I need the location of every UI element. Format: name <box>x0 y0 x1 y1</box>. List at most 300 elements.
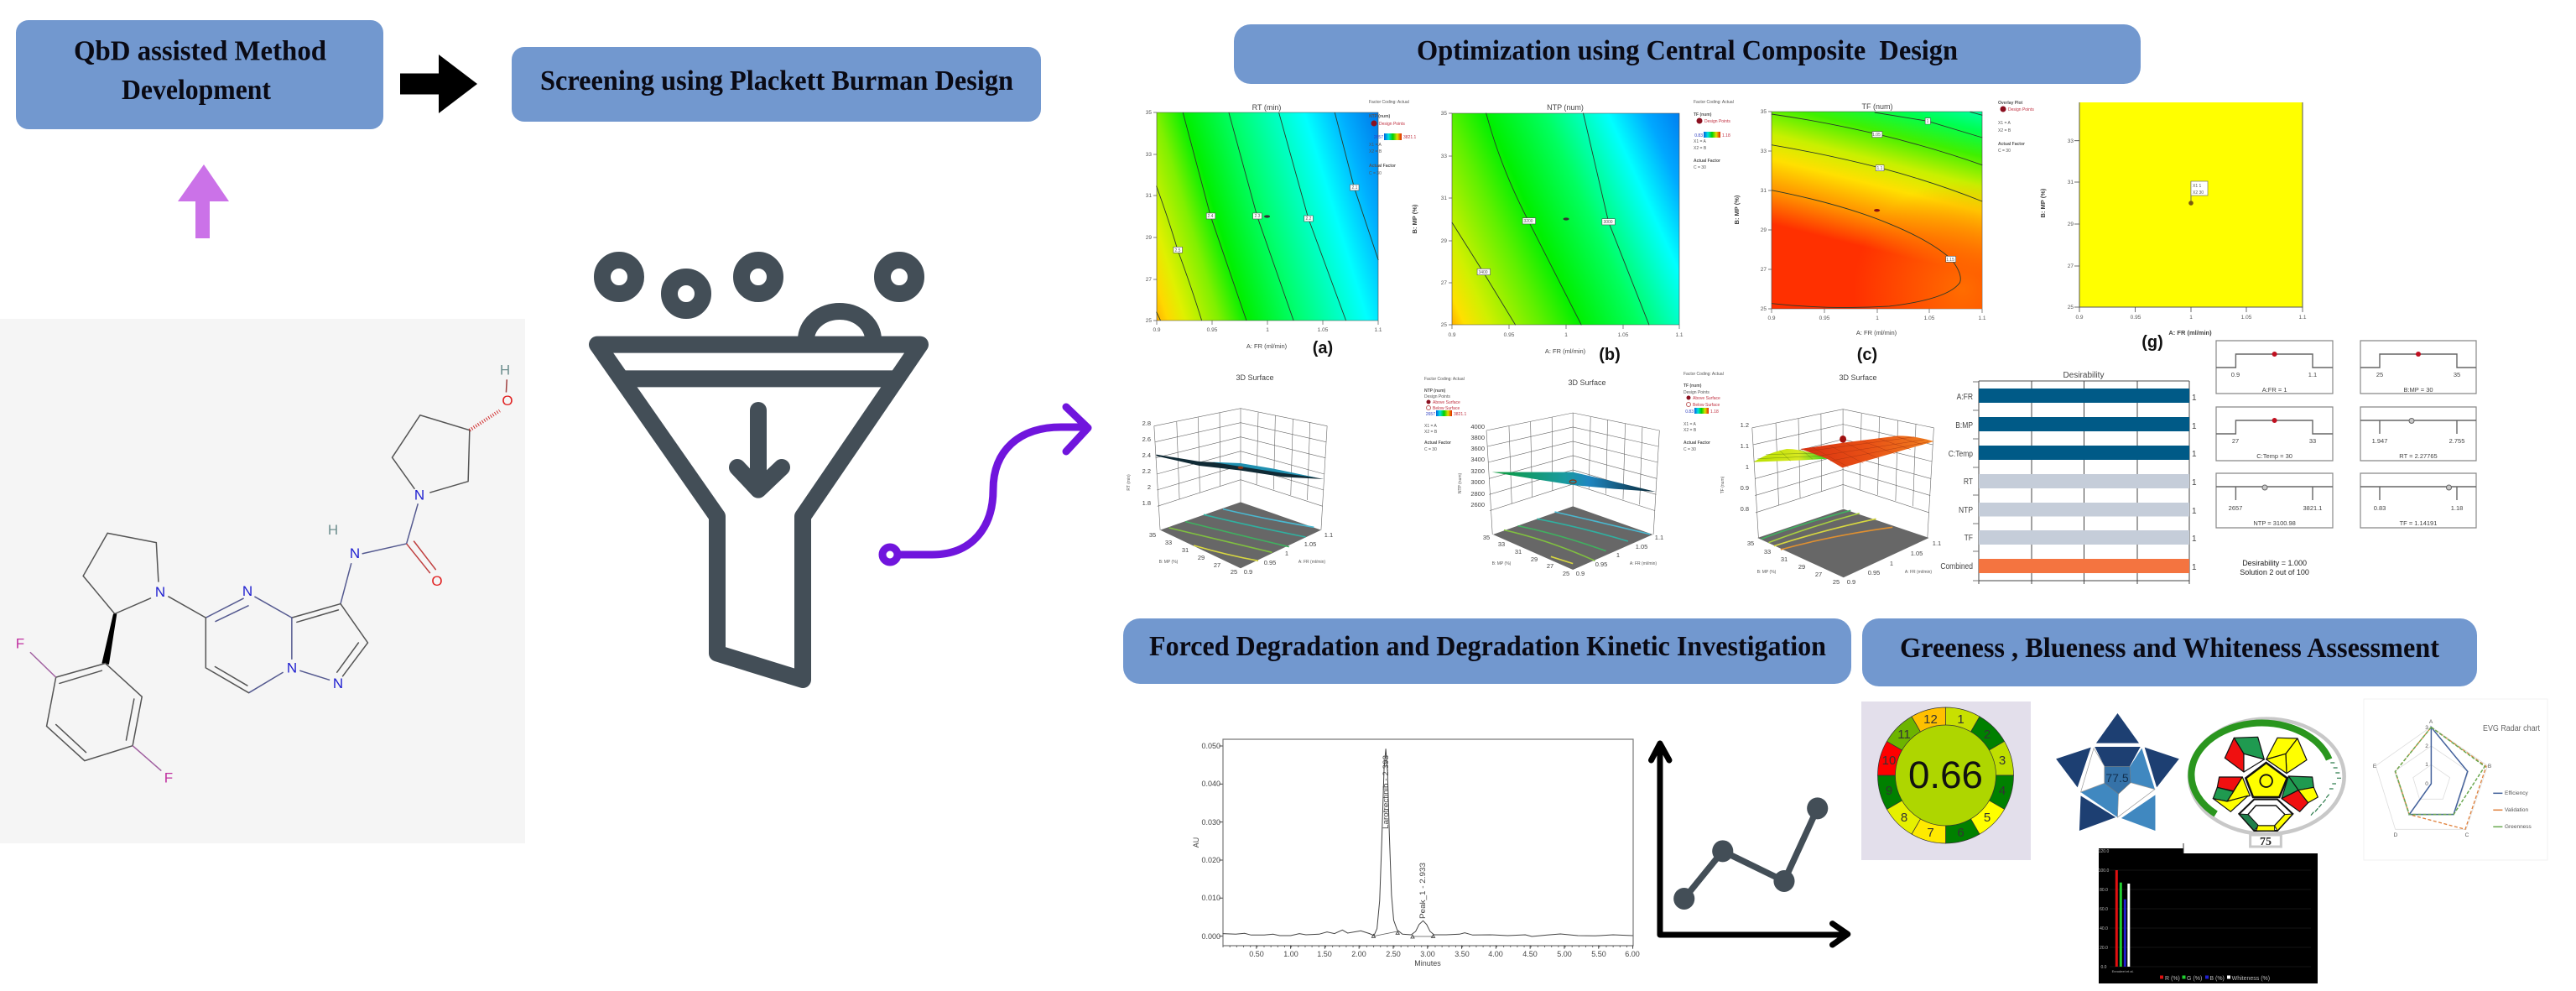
chart: EVG radar chart: EVG Radar chart <box>2483 724 2540 733</box>
chart: contour plot NTP (b): B: MP (%) <box>1733 195 1741 224</box>
chart: 3D surface RT: RT (min) <box>1127 474 1132 491</box>
chart: contour plot RT (a): 27 <box>1146 277 1152 283</box>
chart: 3D surface NTP: 3000 <box>1470 478 1485 486</box>
chart: 3D surface NTP: 0.9 <box>1576 570 1585 577</box>
panel: factor and response solution slider panels: 27 <box>2232 437 2239 445</box>
chart: 3D surface NTP: 25 <box>1563 570 1569 577</box>
chart: contour plot TF (c): 1.1 <box>1978 316 1986 321</box>
chart: RGB whiteness bar chart on black: 0.0 <box>2101 965 2107 970</box>
chart: green pictogram 75 <box>2189 719 2344 848</box>
chart: overlay plot (g): A: FR (ml/min) <box>2168 329 2212 336</box>
chart: HPLC chromatogram: Larotrectinib - 2.393 <box>1382 755 1390 829</box>
arrow: purple curved connector <box>882 407 1088 562</box>
chart: HPLC chromatogram: 5.00 <box>1557 950 1572 958</box>
chart: AGREE pictogram 0.66: 6 <box>1957 826 1965 840</box>
chart: contour plot NTP (b) <box>1441 100 1741 364</box>
chart: 3D surface NTP: NTP (num) <box>1458 472 1463 493</box>
chart: desirability bar chart: Desirability <box>2063 371 2104 380</box>
chart: contour plot TF (c): Overlay Plot <box>1998 101 2023 106</box>
chart: 3D surface TF: B: MP (%) <box>1757 570 1777 575</box>
chart: contour plot TF (c) <box>1761 101 2034 364</box>
chart: RGB whiteness bar chart on black: 20.0 <box>2100 946 2108 951</box>
chart: 3D surface RT: 0.95 <box>1264 559 1276 566</box>
chart: RGB whiteness bar chart on black: B (%) <box>2209 976 2225 982</box>
chart: contour plot TF (c): 33 <box>1761 149 1767 154</box>
panel: factor and response solution slider panels: NTP = 3100.98 <box>2253 519 2296 527</box>
chart: HPLC chromatogram: 0.000 <box>1201 932 1220 941</box>
chart: 3D surface NTP: Actual Factor <box>1424 441 1451 446</box>
panel: molecule structure: H <box>328 522 338 538</box>
chart: desirability bar chart: 1 <box>2192 450 2197 459</box>
chart: contour plot RT (a): 35 <box>1146 110 1152 116</box>
chart: overlay plot (g): X1 1 <box>2193 184 2202 189</box>
chart: contour plot TF (c): C = 30 <box>1998 149 2011 154</box>
chart: 3D surface NTP: Design Points <box>1424 394 1450 399</box>
chart: HPLC chromatogram: 2.50 <box>1386 950 1401 958</box>
chart: HPLC chromatogram: 1.00 <box>1283 950 1298 958</box>
chart: HPLC chromatogram: 4.00 <box>1488 950 1503 958</box>
chart: contour plot RT (a): X1 = A <box>1369 143 1382 148</box>
chart: 3D surface NTP: 2800 <box>1470 490 1485 498</box>
heading: QbD assisted Method Development <box>16 20 383 129</box>
chart: contour plot RT (a): RT (min) <box>1252 103 1281 112</box>
chart: contour plot RT (a): 1.05 <box>1318 327 1329 333</box>
panel: factor and response solution slider panels: Solution 2 out of 100 <box>2240 568 2309 576</box>
heading: Optimization using Central Composite Design <box>1234 24 2141 84</box>
chart: contour plot NTP (b): 3000 <box>1603 220 1613 225</box>
chart: 3D surface TF: 0.95 <box>1868 569 1880 576</box>
chart: contour plot NTP (b): 1.18 <box>1722 133 1730 138</box>
chart: HPLC chromatogram: 0.020 <box>1201 856 1220 864</box>
panel: factor and response solution slider panels: RT = 2.27765 <box>2399 452 2438 460</box>
panel: molecule structure: F <box>16 636 24 652</box>
chart: desirability bar chart: NTP <box>1959 505 1973 514</box>
chart: 3D surface NTP: Below Surface <box>1433 406 1460 411</box>
panel: molecule structure: N <box>242 583 252 599</box>
chart: 3D surface TF: 1.1 <box>1741 442 1749 450</box>
chart: 3D surface NTP: 0.95 <box>1595 561 1607 568</box>
chart: AGREE pictogram 0.66: 4 <box>1999 784 2006 798</box>
chart: contour plot NTP (b): TF (num) <box>1694 112 1712 117</box>
chart: contour plot NTP (b): (b) <box>1599 346 1621 364</box>
chart: HPLC chromatogram: 2.00 <box>1351 950 1366 958</box>
chart: contour plot RT (a): 1.1 <box>1374 327 1382 333</box>
chart: AGREE pictogram 0.66: 1 <box>1957 712 1965 727</box>
chart: contour plot NTP (b): 29 <box>1441 238 1447 244</box>
panel: factor and response solution slider panels: 1.18 <box>2451 504 2463 512</box>
chart: contour plot TF (c): Actual Factor <box>1998 142 2025 147</box>
chart: 3D surface RT: 2.8 <box>1142 420 1151 427</box>
chart: 3D surface NTP: NTP (num) <box>1424 389 1446 394</box>
chart: 3D surface RT: 2.6 <box>1142 436 1151 443</box>
chart: AGREE pictogram 0.66: 7 <box>1927 826 1934 840</box>
chart: contour plot RT (a): 3821.1 <box>1403 135 1417 140</box>
chart: AGREE pictogram 0.66: 3 <box>1999 754 2006 768</box>
chart: 3D surface RT: 1.05 <box>1304 540 1316 548</box>
chart: contour plot TF (c): TF (num) <box>1862 102 1893 111</box>
chart: contour plot RT (a): 31 <box>1146 193 1152 199</box>
chart: contour plot RT (a): A: FR (ml/min) <box>1246 342 1288 350</box>
chart: overlay plot (g): 1.05 <box>2241 315 2252 321</box>
chart: contour plot RT (a): C = 30 <box>1369 171 1382 176</box>
panel: molecule structure: N <box>287 660 297 675</box>
chart: contour plot RT (a): 2.1 <box>1352 185 1358 190</box>
chart: contour plot NTP (b): 1 <box>1564 332 1568 338</box>
chart: 3D surface TF: 31 <box>1781 555 1788 563</box>
chart: 3D surface TF: 29 <box>1798 563 1805 571</box>
panel: factor and response solution slider panels: 1.1 <box>2308 371 2317 378</box>
chart: 3D surface NTP: 3D Surface <box>1568 378 1606 387</box>
chart: contour plot NTP (b): NTP (num) <box>1547 103 1584 112</box>
chart: 3D surface NTP: 3400 <box>1470 456 1485 463</box>
chart: contour plot RT (a): Design Points <box>1379 122 1405 127</box>
arrow: pink up arrow <box>178 164 229 238</box>
chart: 3D surface NTP: X2 = B <box>1424 430 1438 435</box>
chart: 3D surface TF: Factor Coding: Actual <box>1684 372 1724 377</box>
chart: contour plot TF (c): 35 <box>1761 109 1767 115</box>
chart: 3D surface TF: 1.2 <box>1741 421 1749 429</box>
chart: overlay plot (g): 29 <box>2068 222 2074 227</box>
chart: desirability bar chart: C:Temp <box>1949 449 1973 458</box>
chart: desirability bar chart: 1 <box>2192 507 2197 516</box>
chart: 3D surface RT: 2.4 <box>1142 451 1151 459</box>
chart: HPLC chromatogram: 3.50 <box>1455 950 1470 958</box>
chart: HPLC chromatogram <box>1192 739 1640 968</box>
chart: contour plot RT (a): 0.9 <box>1153 327 1161 333</box>
chart: desirability bar chart: Combined <box>1940 561 1973 571</box>
chart: desirability bar chart: RT <box>1964 477 1973 486</box>
chart: desirability bar chart <box>1940 371 2197 584</box>
chart: 3D surface NTP: B: MP (%) <box>1492 561 1512 566</box>
chart: 3D surface TF: 35 <box>1747 540 1754 547</box>
chart: contour plot NTP (b): 3400 <box>1478 270 1488 275</box>
chart: contour plot RT (a): 2.3 <box>1255 214 1261 219</box>
panel: factor and response solution slider panels: B:MP = 30 <box>2403 386 2433 394</box>
chart: contour plot TF (c): 0.95 <box>1819 316 1830 321</box>
chart: overlay plot (g): 0.9 <box>2075 315 2084 321</box>
chart: 3D surface NTP <box>1424 377 1663 577</box>
chart: contour plot NTP (b): 25 <box>1441 322 1447 328</box>
chart: 3D surface TF: TF (num) <box>1720 476 1725 493</box>
chart: 3D surface TF: 33 <box>1764 548 1771 555</box>
chart: 3D surface TF: 0.8 <box>1741 505 1749 513</box>
chart: AGREE pictogram 0.66: 9 <box>1886 784 1892 798</box>
heading: Optimization using Central Composite Design: Optimization using Central Composite Design <box>1417 35 1958 66</box>
chart: contour plot NTP (b): A: FR (ml/min) <box>1545 347 1586 355</box>
chart: contour plot TF (c): X2 = B <box>1998 128 2011 133</box>
chart: 3D surface NTP: C = 30 <box>1424 447 1437 452</box>
chart: AGREE pictogram 0.66: 10 <box>1882 754 1896 768</box>
chart: 3D surface NTP: 3200 <box>1470 467 1485 475</box>
chart: EVG radar chart: B <box>2488 764 2491 769</box>
chart: contour plot RT (a): 2.5 <box>1175 248 1181 253</box>
chart: contour plot TF (c): 1 <box>1876 316 1879 321</box>
chart: contour plot NTP (b): 27 <box>1441 280 1447 286</box>
chart: 3D surface TF: X1 = A <box>1684 422 1697 427</box>
chart: 3D surface RT: 35 <box>1149 531 1156 539</box>
chart: RGB whiteness bar chart on black: 120.0 <box>2099 849 2109 854</box>
chart: EVG radar chart: 0 <box>2425 781 2428 787</box>
chart: AGREE pictogram 0.66: 0.66 <box>1908 754 1983 796</box>
chart: HPLC chromatogram: 0.030 <box>1201 818 1220 827</box>
chart: contour plot TF (c): 1.15 <box>1946 258 1954 263</box>
chart: desirability bar chart: 1 <box>2192 535 2197 544</box>
chart: contour plot NTP (b): 3200 <box>1523 219 1533 224</box>
chart: contour plot RT (a): 2.4 <box>1208 214 1214 219</box>
chart: overlay plot (g): 33 <box>2068 138 2074 144</box>
chart: RGB whiteness bar chart on black: 100.0 <box>2099 868 2109 874</box>
chart: EVG radar chart: 2 <box>2425 743 2428 749</box>
chart: desirability bar chart: 1 <box>2192 394 2197 403</box>
chart: overlay plot (g): 27 <box>2068 263 2074 269</box>
chart: contour plot TF (c): A: FR (ml/min) <box>1856 329 1897 336</box>
chart: 3D surface NTP: 1 <box>1616 551 1620 559</box>
chart: HPLC chromatogram: 6.00 <box>1625 950 1640 958</box>
heading: QbD assisted Method Development: QbD assisted Method <box>74 35 326 67</box>
panel: factor and response solution slider panels: A:FR = 1 <box>2262 386 2287 394</box>
chart: contour plot NTP (b): 31 <box>1441 196 1447 201</box>
chart: HPLC chromatogram: 0.050 <box>1201 742 1220 750</box>
panel: molecule structure: F <box>164 770 173 786</box>
chart: desirability bar chart: 1 <box>2192 563 2197 572</box>
chart: EVG radar chart: C <box>2465 832 2469 838</box>
chart: contour plot TF (c): 1.1 <box>1877 166 1883 171</box>
icon: funnel with falling particles <box>597 260 920 680</box>
chart: AGREE pictogram 0.66: 12 <box>1923 712 1938 727</box>
chart: contour plot RT (a): 33 <box>1146 152 1152 158</box>
chart: EVG radar chart: 1 <box>2425 762 2428 768</box>
chart: RGB whiteness bar chart on black: Enrodeet et al. <box>2112 969 2134 973</box>
chart: 3D surface TF: 1.18 <box>1710 409 1719 415</box>
panel: factor and response solution slider panels: 0.83 <box>2374 504 2386 512</box>
chart: contour plot NTP (b): Design Points <box>1704 119 1730 124</box>
chart: HPLC chromatogram: 1.50 <box>1317 950 1332 958</box>
chart: EVG radar chart: D <box>2394 832 2398 838</box>
chart: contour plot TF (c): 31 <box>1761 188 1767 194</box>
icon: kinetics line chart with axes <box>1652 743 1848 945</box>
chart: contour plot RT (a): Actual Factor <box>1369 164 1396 169</box>
chart: 3D surface TF: Below Surface <box>1693 403 1720 408</box>
chart: AGREE pictogram 0.66: 2 <box>1984 728 1991 742</box>
heading: Screening using Plackett Burman Design: Screening using Plackett Burman Design <box>540 65 1013 96</box>
chart: 3D surface TF: 25 <box>1833 578 1840 586</box>
panel: factor and response solution slider panels: TF = 1.14191 <box>2400 519 2437 527</box>
chart: 3D surface TF: C = 30 <box>1684 447 1696 452</box>
chart: contour plot TF (c): 29 <box>1761 227 1767 233</box>
chart: green pictogram 75: 75 <box>2260 836 2272 848</box>
chart: 3D surface RT: 1 <box>1285 550 1288 557</box>
chart: contour plot TF (c): 27 <box>1761 267 1767 273</box>
panel: molecule structure: N <box>414 488 424 503</box>
chart: EVG radar chart: A <box>2429 719 2433 725</box>
panel: factor and response solution slider panels: 2.755 <box>2449 437 2464 445</box>
heading: Forced Degradation and Degradation Kinetic Investigation: Forced Degradation and Degradation Kinetic Investigation <box>1149 631 1826 662</box>
chart: contour plot TF (c): Design Points <box>2008 107 2034 112</box>
panel: molecule structure: O <box>431 573 443 589</box>
chart: contour plot RT (a): 29 <box>1146 235 1152 241</box>
chart: 3D surface NTP: 1.1 <box>1655 534 1663 541</box>
chart: 3D surface TF <box>1684 372 1941 586</box>
chart: desirability bar chart: 1 <box>2192 422 2197 431</box>
chart: 3D surface NTP: 3600 <box>1470 445 1485 452</box>
chart: contour plot NTP (b): 1.1 <box>1675 332 1684 338</box>
chart: 3D surface TF: 0.9 <box>1847 578 1855 586</box>
chart: 3D surface TF: TF (num) <box>1684 383 1702 389</box>
chart: RGB whiteness bar chart on black: 60.0 <box>2100 907 2108 912</box>
chart: contour plot NTP (b): 0.83 <box>1694 133 1703 138</box>
arrow: black right arrow <box>400 55 477 113</box>
chart: 3D surface TF: X2 = B <box>1684 428 1697 433</box>
chart: 3D surface RT: 27 <box>1214 561 1220 569</box>
chart: 3D surface NTP: 33 <box>1498 540 1505 548</box>
chart: HPLC chromatogram: 0.010 <box>1201 894 1220 902</box>
chart: contour plot TF (c): 25 <box>1761 306 1767 312</box>
panel: molecule structure: N <box>155 584 165 600</box>
heading: Forced Degradation and Degradation Kinetic Investigation <box>1123 618 1851 684</box>
chart: contour plot RT (a): X2 = B <box>1369 149 1382 154</box>
chart: 3D surface NTP: Above Surface <box>1433 400 1460 405</box>
chart: 3D surface RT: 33 <box>1165 539 1172 546</box>
chart: EVG radar chart <box>2364 699 2547 860</box>
chart: RGB whiteness bar chart on black: R (%) <box>2165 976 2180 982</box>
panel: molecule structure: N <box>333 675 343 691</box>
chart: HPLC chromatogram: Peak_1 - 2.933 <box>1418 863 1427 919</box>
chart: 3D surface TF: A: FR (ml/min) <box>1905 570 1932 575</box>
chart: 3D surface NTP: 31 <box>1515 548 1522 555</box>
chart: overlay plot (g): 25 <box>2068 305 2074 310</box>
panel: molecule structure: O <box>502 393 513 409</box>
chart: contour plot TF (c): 0.9 <box>1767 316 1776 321</box>
chart: 3D surface TF: 1.05 <box>1911 550 1923 557</box>
chart: overlay plot (g): 1 <box>2189 315 2193 321</box>
chart: 3D surface RT: A: FR (ml/min) <box>1298 560 1325 565</box>
heading: QbD assisted Method Development: Development <box>122 75 272 106</box>
chart: AGREE pictogram 0.66: 8 <box>1901 811 1907 825</box>
panel: factor and response solution slider panels: 25 <box>2376 371 2383 378</box>
chart: contour plot RT (a): 25 <box>1146 318 1152 324</box>
chart: 3D surface RT: 1.1 <box>1324 531 1333 539</box>
panel: molecule structure: H <box>500 362 510 378</box>
chart: contour plot RT (a): 1 <box>1266 327 1269 333</box>
chart: contour plot TF (c): 1.05 <box>1924 316 1935 321</box>
chart: contour plot NTP (b): 33 <box>1441 154 1447 159</box>
chart: contour plot RT (a): NTP (num) <box>1369 114 1391 119</box>
chart: EVG radar chart: E <box>2373 764 2377 769</box>
chart: 3D surface NTP: Factor Coding: Actual <box>1424 377 1465 382</box>
chart: RGB whiteness bar chart on black <box>2099 843 2318 983</box>
chart: contour plot NTP (b): 1.05 <box>1618 332 1629 338</box>
chart: overlay plot (g): X2 30 <box>2193 190 2204 196</box>
chart: contour plot TF (c): 1.05 <box>1872 133 1881 138</box>
chart: 3D surface NTP: X1 = A <box>1424 424 1438 429</box>
chart: blue star pictogram 77.5: 77.5 <box>2105 771 2129 785</box>
chart: 3D surface TF: 1.1 <box>1933 540 1941 547</box>
panel: factor and response solution slider panels: 1.947 <box>2372 437 2387 445</box>
panel: factor and response solution slider panels: Desirability = 1.000 <box>2242 559 2307 567</box>
chart: contour plot NTP (b): Actual Factor <box>1694 159 1720 164</box>
chart: HPLC chromatogram: AU <box>1192 837 1200 848</box>
chart: desirability bar chart: B:MP <box>1955 420 1973 430</box>
heading: Greeness, Blueness and Whiteness Assessment <box>1862 618 2477 686</box>
heading: Screening using Plackett Burman Design <box>512 47 1041 122</box>
chart: contour plot RT (a): Factor Coding: Actual <box>1369 100 1409 105</box>
panel: factor and response solution slider panels: 33 <box>2309 437 2316 445</box>
chart: contour plot NTP (b): X1 = A <box>1694 139 1707 144</box>
chart: 3D surface NTP: 3800 <box>1470 434 1485 441</box>
panel: factor and response solution slider panels: C:Temp = 30 <box>2256 452 2292 460</box>
chart: overlay plot (g) <box>2039 102 2307 352</box>
chart: contour plot NTP (b): 0.9 <box>1448 332 1456 338</box>
chart: contour plot NTP (b): 0.95 <box>1504 332 1515 338</box>
chart: 3D surface TF: Above Surface <box>1693 396 1720 401</box>
chart: contour plot RT (a): 0.95 <box>1207 327 1218 333</box>
chart: 3D surface TF: 0.9 <box>1741 484 1749 492</box>
chart: overlay plot (g): B: MP (%) <box>2039 188 2047 217</box>
chart: EVG radar chart: Efficiency <box>2505 790 2528 796</box>
heading: Greeness, Blueness and Whiteness Assessment: Greeness , Blueness and Whiteness Assessment <box>1900 633 2440 664</box>
chart: AGREE pictogram 0.66: 5 <box>1984 811 1991 825</box>
chart: RGB whiteness bar chart on black: 80.0 <box>2100 888 2108 893</box>
chart: HPLC chromatogram: Minutes <box>1414 959 1441 968</box>
chart: 3D surface RT: 1.8 <box>1142 499 1151 507</box>
chart: 3D surface RT: 25 <box>1231 568 1237 576</box>
chart: contour plot TF (c): (c) <box>1857 346 1877 364</box>
chart: AGREE pictogram 0.66: 11 <box>1897 728 1911 742</box>
chart: HPLC chromatogram: 5.50 <box>1591 950 1606 958</box>
chart: desirability bar chart: A:FR <box>1957 392 1973 401</box>
chart: contour plot RT (a): 2.2 <box>1306 216 1312 222</box>
chart: desirability bar chart: 1 <box>2192 478 2197 488</box>
chart: HPLC chromatogram: 3.00 <box>1420 950 1435 958</box>
chart: RGB whiteness bar chart on black: Whiteness (%) <box>2232 976 2270 982</box>
chart: HPLC chromatogram: 4.50 <box>1522 950 1538 958</box>
chart: 3D surface NTP: 1.05 <box>1636 543 1647 550</box>
chart: EVG radar chart: Greenness <box>2505 824 2532 830</box>
chart: EVG radar chart: 3 <box>2425 725 2428 731</box>
chart: 3D surface NTP: 2600 <box>1470 501 1485 509</box>
chart: contour plot TF (c): 1 <box>1927 119 1929 124</box>
chart: contour plot NTP (b): C = 30 <box>1694 165 1706 170</box>
chart: EVG radar chart: Validation <box>2505 807 2528 813</box>
chart: contour plot RT (a): 2657 <box>1374 135 1383 140</box>
chart: 3D surface NTP: 27 <box>1547 562 1553 570</box>
chart: 3D surface TF: 3D Surface <box>1839 373 1877 382</box>
panel: factor and response solution slider panels: 2657 <box>2229 504 2242 512</box>
chart: 3D surface RT: B: MP (%) <box>1159 560 1179 565</box>
chart: RGB whiteness bar chart on black: 40.0 <box>2100 926 2108 931</box>
panel: factor and response solution slider panels: 0.9 <box>2231 371 2240 378</box>
chart: 3D surface RT: 31 <box>1182 546 1189 554</box>
panel: factor and response solution slider panels <box>2216 341 2476 576</box>
chart: contour plot TF (c): X1 = A <box>1998 121 2011 126</box>
chart: overlay plot (g): 0.95 <box>2131 315 2141 321</box>
chart: overlay plot (g): (g) <box>2141 333 2163 352</box>
chart: 3D surface RT: 3D Surface <box>1236 373 1274 382</box>
chart: 3D surface TF: Design Points <box>1684 390 1710 395</box>
chart: overlay plot (g): 31 <box>2068 180 2074 185</box>
chart: 3D surface RT: 29 <box>1198 554 1205 561</box>
chart: blue star pictogram 77.5 <box>2056 713 2179 831</box>
chart: 3D surface TF: Actual Factor <box>1684 441 1710 446</box>
chart: contour plot RT (a): B: MP (%) <box>1411 204 1418 233</box>
chart: contour plot RT (a): (a) <box>1313 339 1333 357</box>
chart: RGB whiteness bar chart on black: G (%) <box>2187 976 2202 982</box>
chart: desirability bar chart: TF <box>1965 533 1973 542</box>
chart: AGREE pictogram 0.66 <box>1861 702 2031 860</box>
panel: molecule structure: N <box>350 545 360 561</box>
chart: 3D surface NTP: A: FR (ml/min) <box>1630 561 1657 566</box>
chart: 3D surface NTP: 29 <box>1531 555 1538 563</box>
